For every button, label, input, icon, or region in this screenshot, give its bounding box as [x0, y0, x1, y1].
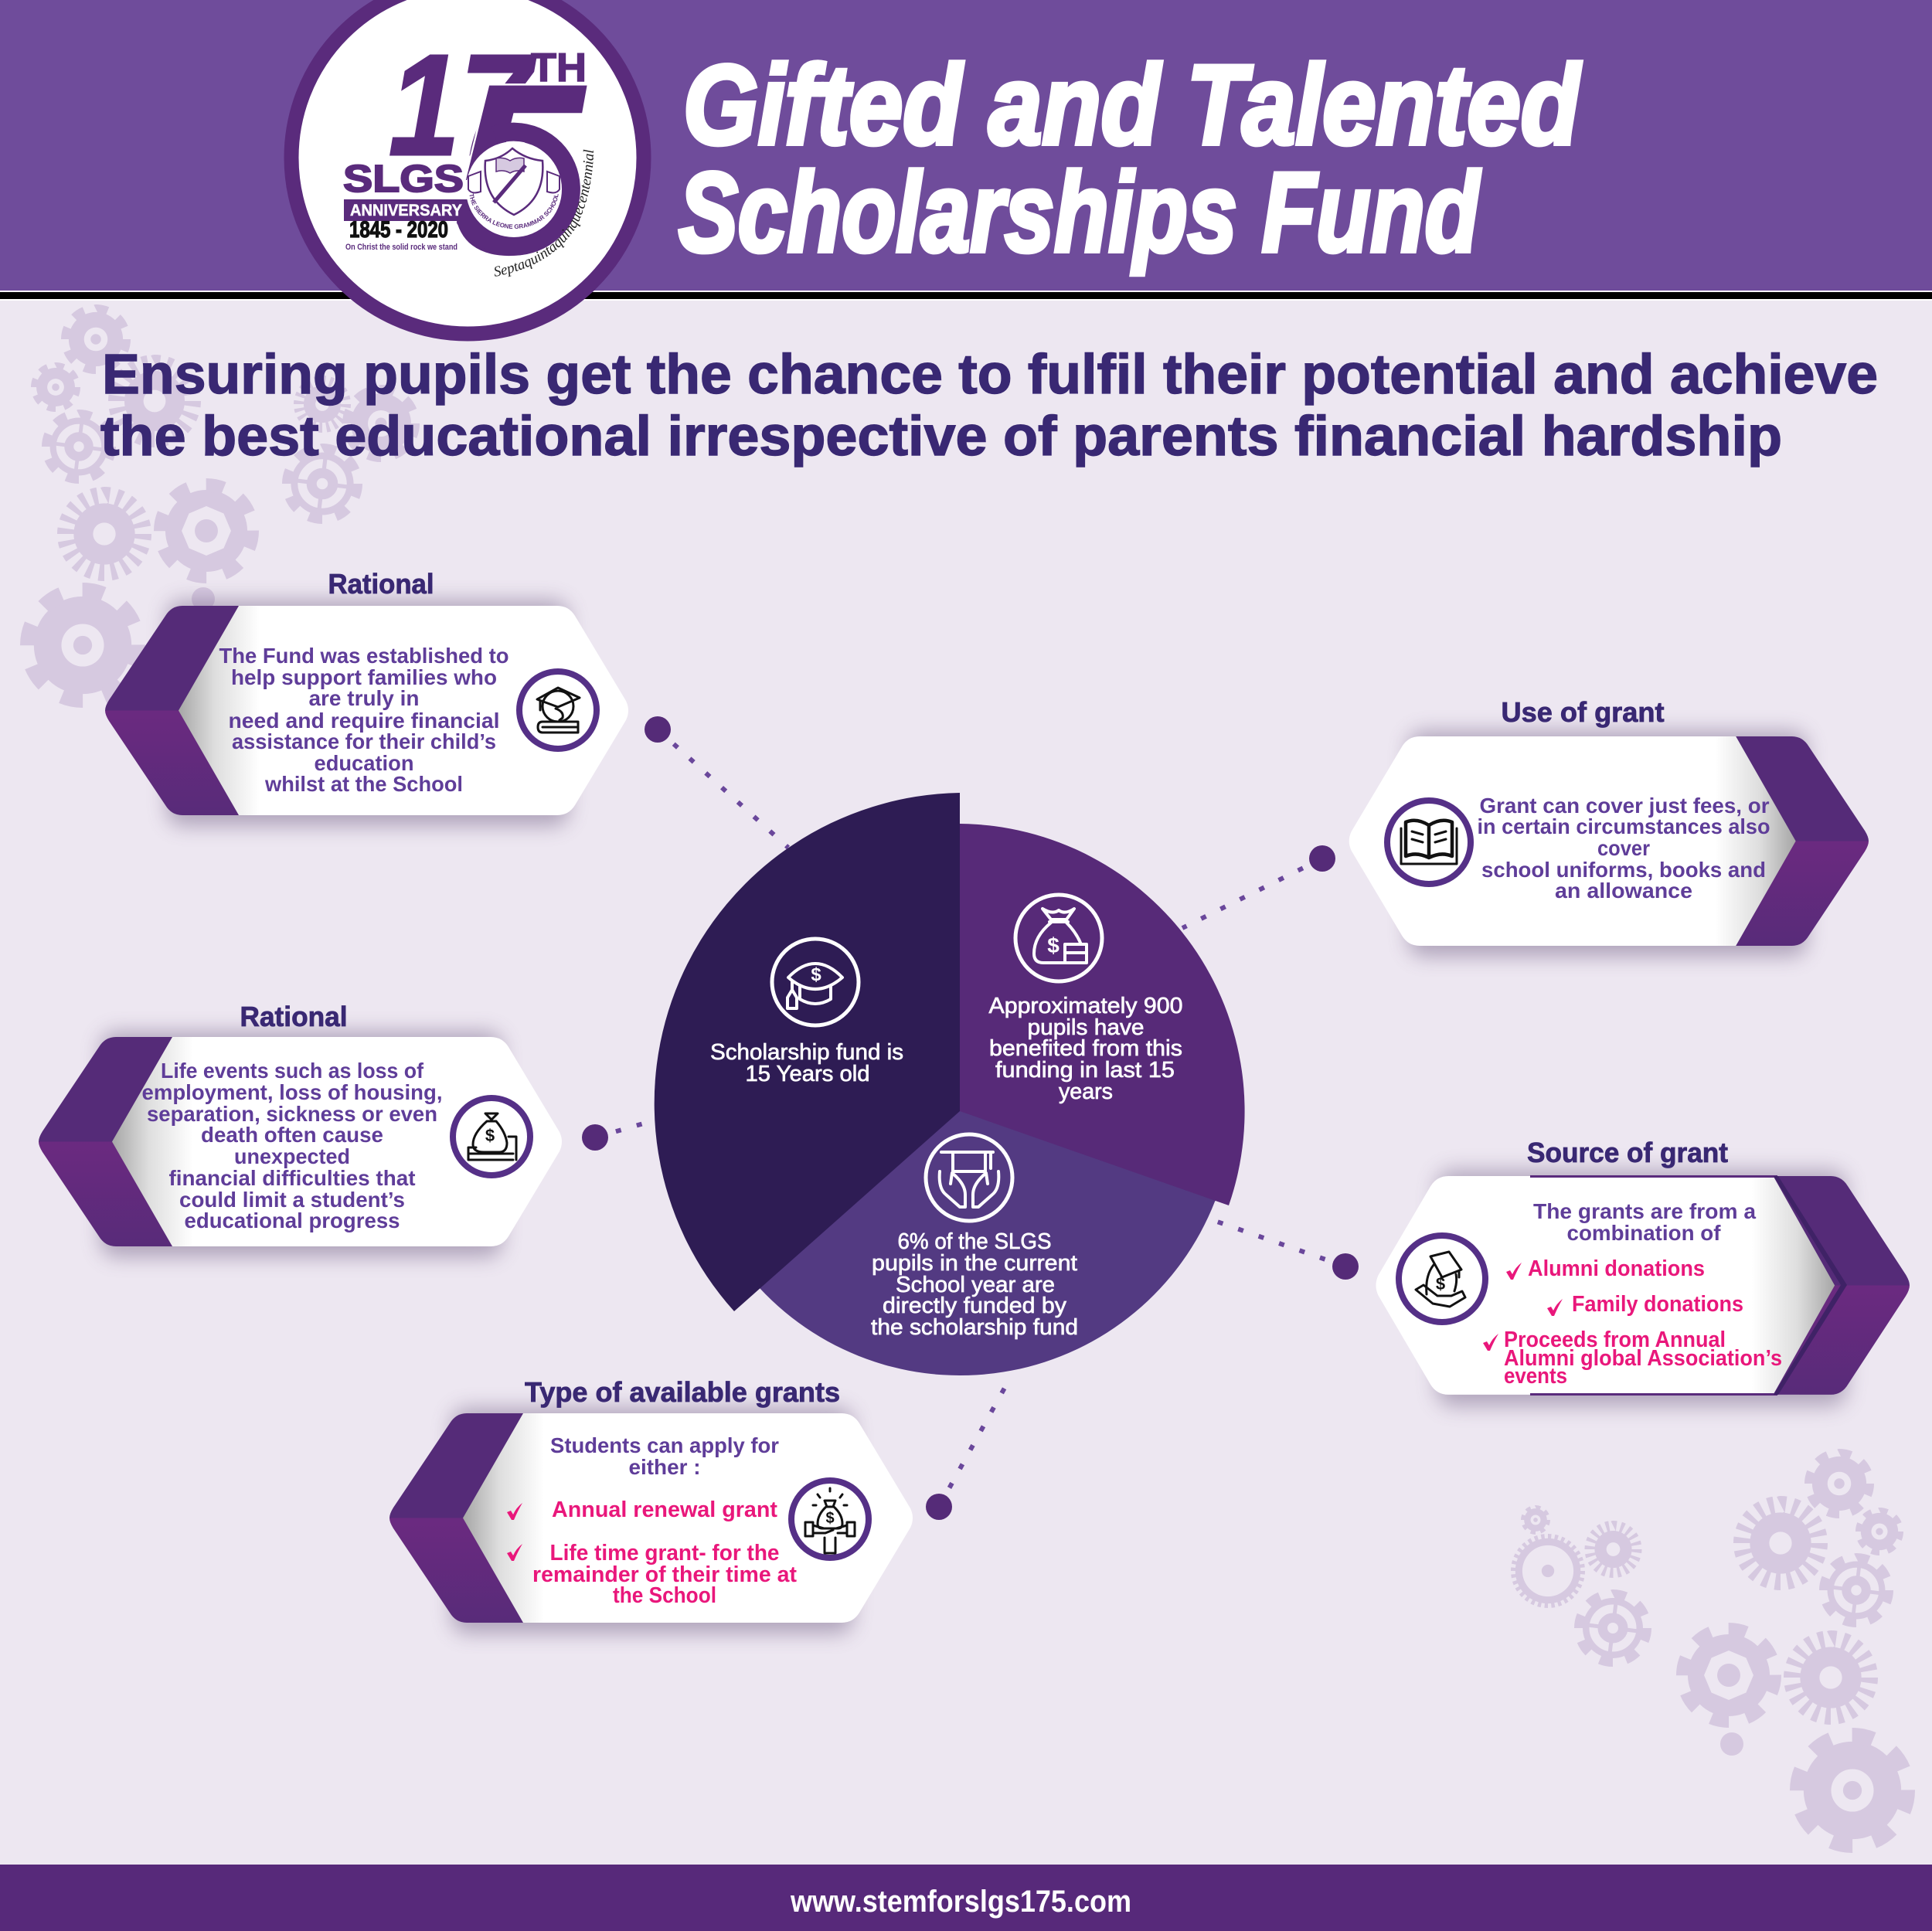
text: approximately 900 pupils: benefited from this [989, 1036, 1182, 1061]
icon: hand holding tuition bag: $ [1436, 1274, 1445, 1294]
text block: whilst at the School [264, 772, 463, 796]
heading: Source of grant [1527, 1137, 1728, 1168]
text block: help support families who [231, 665, 497, 689]
pie slice: fund age [655, 793, 960, 1311]
text: scholarship fund age: Scholarship fund is [710, 1040, 903, 1065]
text: scholarship fund age [710, 1040, 903, 1086]
text block: school uniforms, books and [1481, 858, 1766, 882]
text block: The Fund was established to [219, 644, 509, 668]
heading: Use of grant [1501, 696, 1665, 728]
logo crest [467, 141, 562, 237]
text: 6 percent of pupils: directly funded by [883, 1294, 1067, 1318]
logo anniversary bar: ANNIVERSARY [350, 202, 462, 219]
text block: cover [1597, 836, 1650, 860]
icon: graduation cap with dollar: $ [811, 964, 821, 985]
icon: money bag and coins [453, 1098, 530, 1175]
text: 6 percent of pupils: 6% of the SLGS [898, 1229, 1051, 1254]
icon: graduation cap with dollar [772, 939, 859, 1025]
text: 6 percent of pupils: the scholarship fund [871, 1315, 1078, 1340]
text block: employment, loss of housing, [142, 1080, 442, 1104]
logo SLGS: SLGS [343, 158, 464, 200]
text block [550, 1433, 779, 1479]
subtitle [100, 344, 1878, 467]
text: 6 percent of pupils: pupils in the current [872, 1251, 1077, 1276]
panel: source of grant [1376, 1137, 1910, 1406]
text block: education [314, 751, 414, 775]
logo years: 1845 - 2020 [349, 217, 448, 243]
icon: hands with money bag [791, 1481, 869, 1558]
text block: either : [629, 1455, 700, 1479]
dotted connectors [595, 729, 1345, 1507]
checklist: remainder of their time at [532, 1562, 797, 1587]
checklist: the School [613, 1583, 716, 1608]
checklist: Life time grant- for the [550, 1541, 779, 1566]
text block [219, 644, 509, 796]
connector dot: use of grant [1309, 845, 1335, 872]
panel: type of available grants [389, 1376, 913, 1634]
text: 6 percent of pupils [871, 1229, 1078, 1340]
text block: educational progress [184, 1209, 400, 1232]
subtitle: the best educational irrespective of parents financial hardship [100, 406, 1782, 467]
text block [1533, 1199, 1756, 1245]
checklist [507, 1498, 797, 1608]
text block: combination of [1567, 1221, 1721, 1245]
panel: rational 1 [105, 568, 628, 826]
checklist: Annual renewal grant [552, 1498, 777, 1522]
text: approximately 900 pupils: pupils have [1028, 1015, 1144, 1040]
panel: use of grant [1349, 696, 1869, 957]
icon: hand holding tuition bag [1399, 1236, 1485, 1322]
checklist [1483, 1256, 1782, 1389]
panel: rational 2 [39, 1001, 562, 1257]
text block: death often cause [201, 1123, 383, 1147]
checklist: Proceeds from Annual [1504, 1328, 1726, 1352]
icon: globe and book [519, 671, 597, 749]
heading: Type of available grants [525, 1376, 840, 1408]
subtitle: Ensuring pupils get the chance to fulfil their potential and achieve [102, 344, 1878, 406]
footer url: www.stemforslgs175.com [790, 1885, 1131, 1919]
logo crest: THE SIERRA LEONE GRAMMAR SCHOOL [470, 193, 559, 229]
text: approximately 900 pupils [989, 994, 1182, 1104]
checklist: Alumni global Association’s [1504, 1346, 1782, 1371]
text block: Students can apply for [550, 1433, 779, 1457]
connector dot: rational 2 [582, 1124, 608, 1151]
pie slice: pupils benefited [960, 824, 1245, 1205]
text block: unexpected [234, 1144, 350, 1168]
text block [1478, 794, 1770, 903]
checklist: Family donations [1572, 1292, 1743, 1317]
icon: money bag: $ [1047, 933, 1060, 957]
connector dot: types of grant [926, 1494, 952, 1520]
icon: money bag [1015, 895, 1102, 981]
text block: Life events such as loss of [161, 1059, 424, 1083]
text block [142, 1059, 442, 1232]
title: Scholarships Fund [679, 149, 1481, 275]
text: 6 percent of pupils: School year are [896, 1273, 1055, 1297]
connector dot: rational 1 [645, 716, 671, 743]
logo script: Septaquintaquinquecentennial [495, 150, 594, 277]
icon: hands and mortarboard [926, 1134, 1012, 1221]
text block: separation, sickness or even [147, 1102, 437, 1126]
text block: are truly in [309, 686, 419, 710]
heading: Rational [240, 1001, 348, 1032]
checklist: events [1504, 1364, 1567, 1389]
text block: The grants are from a [1533, 1199, 1756, 1223]
text: approximately 900 pupils: years [1059, 1079, 1113, 1104]
decorative gears bottom right [1513, 1453, 1906, 1844]
logo numerals: 5 [453, 32, 590, 305]
text: approximately 900 pupils: funding in last 15 [995, 1058, 1175, 1083]
logo TH: TH [531, 46, 587, 90]
pie slice: pupils funded [760, 1105, 1219, 1375]
text: approximately 900 pupils: Approximately 900 [989, 994, 1182, 1018]
text: scholarship fund age: 15 Years old [745, 1062, 870, 1086]
decorative gears top left [29, 309, 414, 699]
title: Gifted and Talented [683, 42, 1581, 168]
logo numerals: 17 [389, 25, 536, 185]
text block: could limit a student’s [179, 1188, 405, 1212]
header band [0, 0, 1932, 301]
central pie chart [655, 793, 1245, 1375]
text block: an allowance [1555, 879, 1692, 903]
icon: open book [1387, 801, 1471, 884]
text block: need and require financial [229, 709, 499, 733]
text block: assistance for their child’s [232, 729, 496, 753]
footer band [0, 1865, 1932, 1931]
logo motto: On Christ the solid rock we stand [345, 243, 457, 252]
icon: hands with money bag: $ [825, 1510, 835, 1527]
logo numerals [389, 25, 590, 305]
title [679, 42, 1581, 275]
heading: Rational [328, 568, 434, 600]
text block: financial difficulties that [168, 1166, 416, 1190]
text block: Grant can cover just fees, or [1479, 794, 1770, 818]
checklist: Alumni donations [1528, 1256, 1705, 1281]
connector dot: source of grant [1332, 1253, 1359, 1280]
icon: money bag and coins: $ [485, 1126, 495, 1145]
text block: in certain circumstances also [1478, 814, 1770, 838]
logo: 175th anniversary badge [284, 0, 651, 342]
